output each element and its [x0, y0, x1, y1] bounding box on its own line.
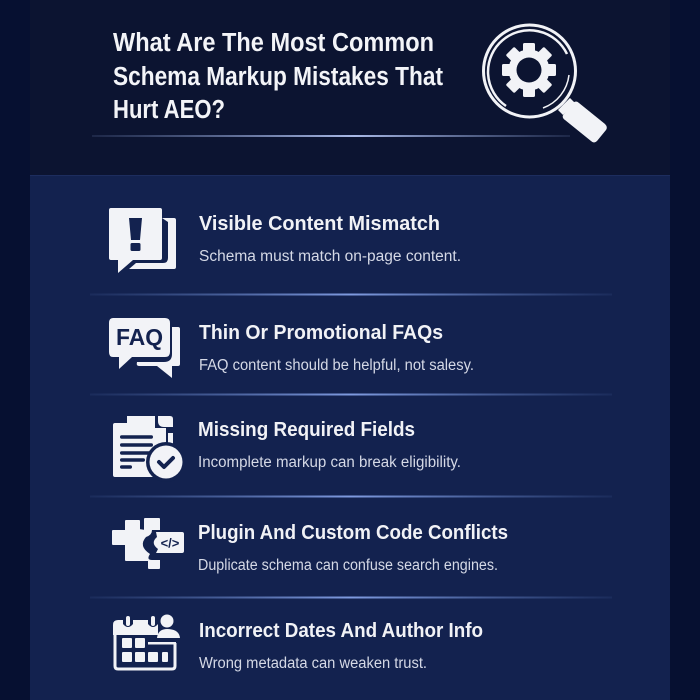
row: visible content mismatch	[109, 208, 461, 273]
icon: alert speech bubbles	[109, 208, 176, 273]
heading: Incorrect Dates And Author Info	[199, 620, 483, 642]
icon: FAQ speech bubbles	[109, 318, 180, 378]
icon: calendar with person	[113, 614, 180, 669]
icon: document with check badge	[113, 416, 186, 482]
description: Incomplete markup can break eligibility.	[198, 454, 461, 471]
heading: Plugin And Custom Code Conflicts	[198, 522, 508, 544]
icon: magnifying glass with gear	[484, 25, 607, 142]
icon: puzzle with code	[113, 519, 186, 568]
title: Schema Markup Mistakes That	[113, 63, 443, 91]
icon: puzzle with code: </>	[161, 536, 180, 550]
heading: Missing Required Fields	[198, 419, 415, 441]
row: plugin and custom code conflicts	[113, 519, 508, 574]
row: thin or promotional FAQs	[109, 318, 474, 378]
panel: mistakes list	[30, 175, 670, 700]
title: What Are The Most Common	[113, 29, 434, 57]
description: Wrong metadata can weaken trust.	[199, 655, 427, 672]
icon: FAQ speech bubbles: FAQ	[116, 324, 163, 350]
header divider	[92, 135, 570, 137]
heading: Thin Or Promotional FAQs	[199, 322, 443, 344]
description: FAQ content should be helpful, not salesy.	[199, 357, 474, 374]
title	[113, 29, 443, 124]
row: incorrect dates and author info	[113, 614, 483, 672]
description: Duplicate schema can confuse search engines.	[198, 557, 498, 574]
heading: Visible Content Mismatch	[199, 213, 440, 235]
header panel	[30, 0, 670, 175]
row: missing required fields	[113, 416, 461, 482]
title: Hurt AEO?	[113, 96, 225, 124]
description: Schema must match on-page content.	[199, 248, 461, 265]
